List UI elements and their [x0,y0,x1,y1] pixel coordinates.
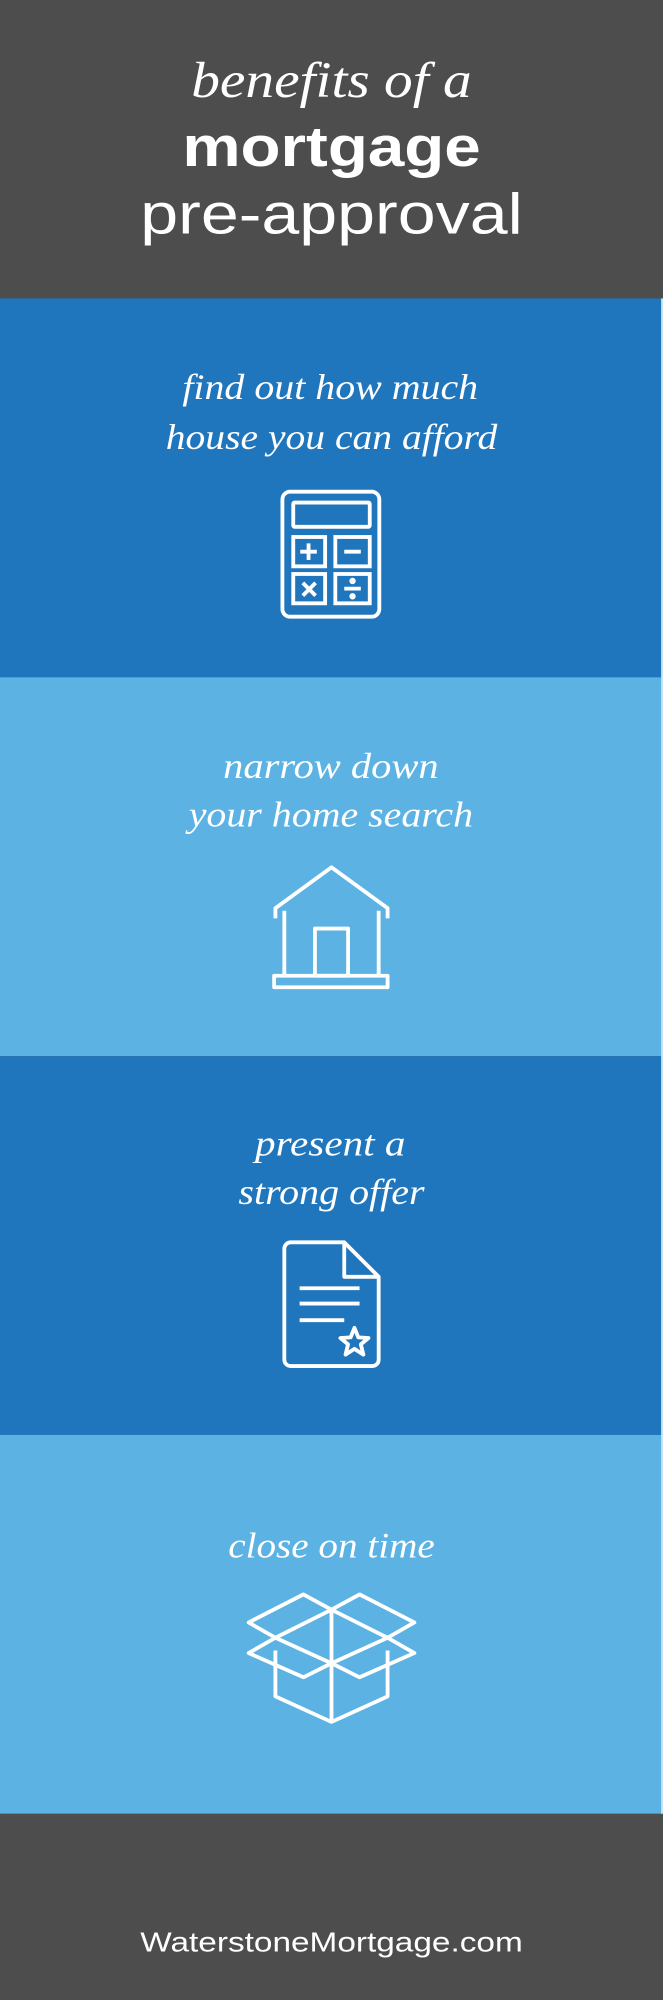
panel: close on time [0,1435,663,1814]
heading: narrow search: narrow down [223,746,439,786]
title [140,53,523,246]
title: benefits of a [191,53,472,109]
title: pre-approval [140,182,523,246]
heading: strong offer [238,1124,425,1212]
heading: afford [166,367,497,457]
heading: strong offer: strong offer [238,1172,425,1212]
panel: afford [0,298,663,677]
footer [0,1814,663,2000]
header panel [0,0,663,298]
icon: calculator [282,492,379,617]
heading: close on time: close on time [228,1525,435,1565]
footer text: website: WaterstoneMortgage.com [140,1927,523,1958]
icon: open box [249,1594,414,1722]
heading: narrow search [185,746,473,835]
icon: document with star [284,1242,379,1366]
icon: house [274,867,388,987]
panel: narrow search [0,677,663,1056]
title: mortgage [182,115,481,178]
panel: strong offer [0,1056,663,1435]
heading: afford: find out how much [182,367,478,407]
heading: strong offer: present a [252,1124,405,1164]
heading: narrow search: your home search [185,795,473,835]
heading: afford: house you can afford [166,417,497,457]
